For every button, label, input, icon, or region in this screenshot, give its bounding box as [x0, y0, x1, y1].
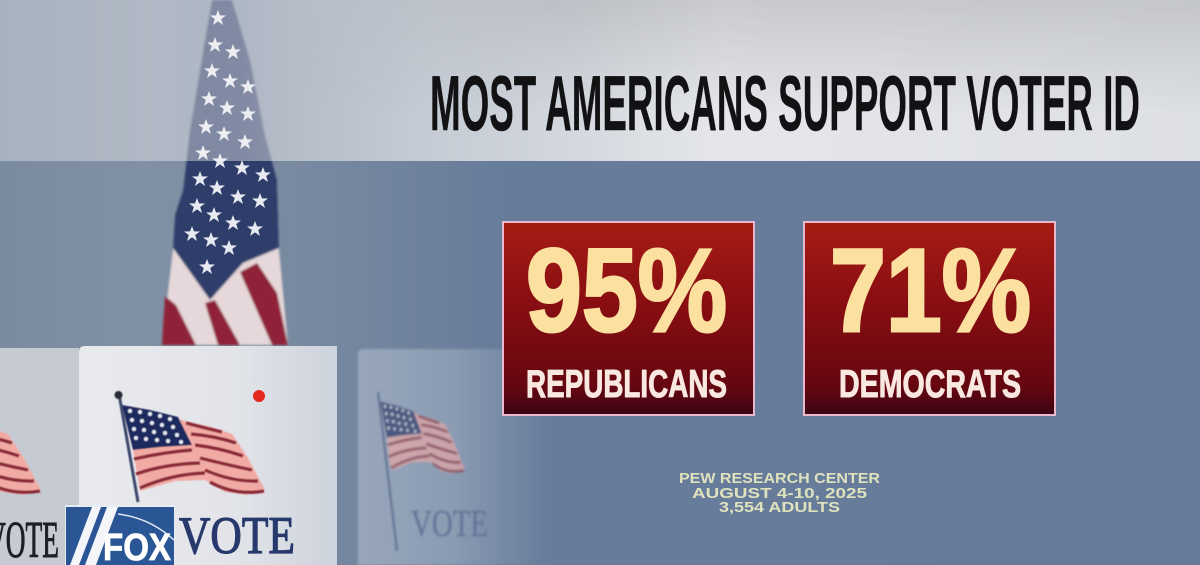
left voting booth: [0, 348, 79, 565]
center voting booth: [79, 346, 337, 565]
source note: AUGUST 4-10, 2025: [692, 485, 867, 502]
faded voting booth: [358, 349, 550, 565]
VOTE label: VOTE: [179, 507, 295, 565]
stat panel: Republicans: [503, 222, 754, 415]
faded voting booth: VOTE: [411, 503, 488, 545]
71% value: 71%: [830, 225, 1031, 357]
top title band: [0, 0, 1200, 161]
stat panel: Democrats: [804, 222, 1055, 415]
red dot: [253, 390, 265, 402]
Fox News logo: [63, 504, 175, 565]
waving flag on booth: [114, 391, 265, 502]
Republicans label: REPUBLICANS: [526, 363, 727, 406]
source note: PEW RESEARCH CENTER: [679, 470, 880, 487]
Democrats label: DEMOCRATS: [839, 363, 1021, 406]
source note: 3,554 ADULTS: [719, 499, 840, 516]
95% value: 95%: [526, 225, 727, 357]
standing American flag: [162, 0, 288, 345]
flag stars: [184, 10, 271, 274]
source note: [679, 470, 880, 516]
